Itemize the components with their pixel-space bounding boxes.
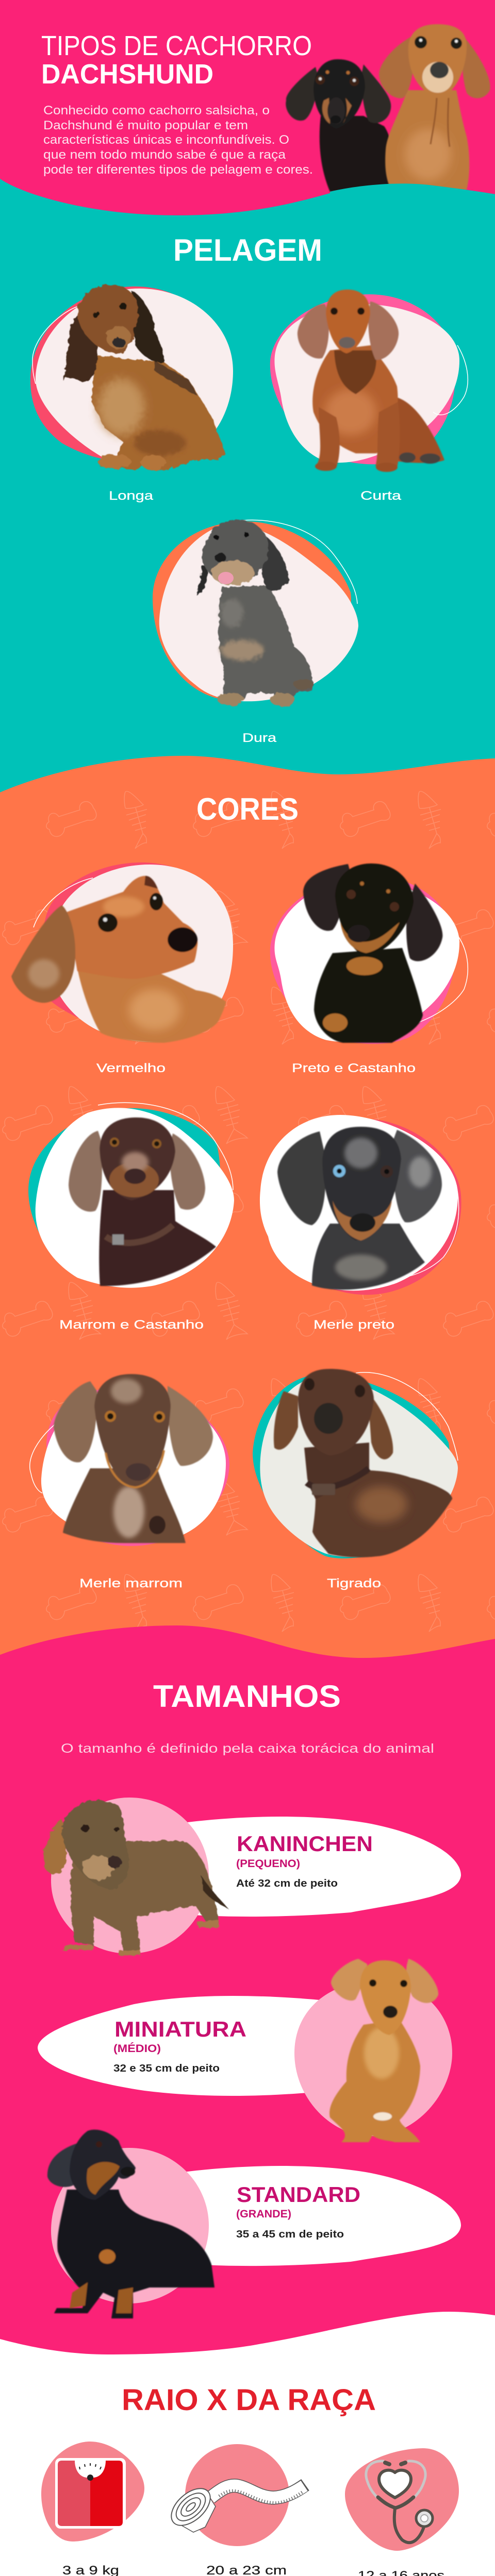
panel: pelagem curta <box>270 290 468 472</box>
name: kaninchen: KANINCHEN <box>237 1832 373 1856</box>
outline arc <box>32 307 77 384</box>
blob backing <box>42 862 222 1036</box>
white speech blob <box>175 2166 461 2266</box>
blob backing red <box>30 286 227 462</box>
dog: brown merle <box>54 1374 213 1543</box>
outline arc <box>227 520 357 604</box>
heading: raio x da raca: RAIO X DA RAÇA <box>122 2383 376 2417</box>
dog: black and tan header dog <box>286 59 393 192</box>
pink circle <box>51 2148 209 2303</box>
icon: measuring tape <box>164 2444 305 2546</box>
panel background: teal pelagem section <box>0 170 495 819</box>
subtitle: tamanhos: O tamanho é definido pela caixa torácica do animal <box>61 1741 434 1756</box>
panel: tamanhos background with wave <box>0 1625 495 2370</box>
pink circle <box>51 1798 209 1954</box>
panel: miniatura <box>38 1959 452 2142</box>
blob backing red <box>289 1119 461 1295</box>
tongue <box>218 572 234 584</box>
dog: black merle <box>277 1127 442 1290</box>
measure: miniatura: 32 e 35 cm de peito <box>113 2063 220 2074</box>
intro text block: pode ter diferentes tipos de pelagem e cores. <box>43 163 313 177</box>
outline arc <box>356 1372 458 1461</box>
dog: brown header dog <box>379 24 490 190</box>
label: vermelho: Vermelho <box>96 1061 166 1075</box>
panel: raio x background white <box>0 2312 495 2576</box>
panel: pelagem dura <box>153 520 358 706</box>
name: miniatura: MINIATURA <box>114 2017 246 2041</box>
dog: wire coat <box>196 520 312 706</box>
label: preto e castanho: Preto e Castanho <box>292 1061 416 1075</box>
label: marrom e castanho: Marrom e Castanho <box>59 1318 204 1332</box>
panel: cor vermelho <box>11 862 233 1043</box>
blob backing teal <box>28 1108 220 1286</box>
intro text block: que nem todo mundo sabe é que a raça <box>43 148 286 162</box>
panel: cor marrom e castanho <box>28 1103 234 1288</box>
title: TIPOS DE CACHORRO <box>41 30 312 61</box>
outline arc <box>98 1103 233 1190</box>
blob white <box>36 1108 234 1288</box>
dog: miniatura <box>329 1959 438 2142</box>
white speech blob <box>38 1996 320 2096</box>
blob light grey <box>260 1377 458 1557</box>
heading: tamanhos: TAMANHOS <box>153 1679 341 1714</box>
label: tigrado: Tigrado <box>327 1577 381 1590</box>
panel: cor merle marrom <box>30 1374 229 1546</box>
blob white <box>260 1115 458 1291</box>
blob backing pink <box>46 1387 229 1546</box>
blob backing <box>270 876 455 1044</box>
dog: kaninchen <box>44 1800 229 1955</box>
white speech blob <box>175 1817 461 1917</box>
label: longa: Longa <box>109 489 154 503</box>
panel: cores background with wave <box>0 756 495 1700</box>
blob cream <box>159 523 358 701</box>
icon: scale <box>41 2442 144 2541</box>
dog: red <box>11 876 226 1043</box>
panel: header <box>0 0 495 215</box>
blob white <box>41 1389 226 1541</box>
outline arc <box>433 345 468 415</box>
size: grande: (GRANDE) <box>236 2208 291 2220</box>
size: pequeno: (PEQUENO) <box>236 1858 300 1870</box>
panel: kaninchen <box>44 1798 461 1955</box>
blob backing orange <box>153 521 351 701</box>
header pink wave background <box>0 0 495 215</box>
panel: pelagem longa <box>30 285 233 471</box>
heading: cores: CORES <box>196 792 299 826</box>
blob backing pink <box>270 294 455 464</box>
outline arc <box>30 1422 58 1493</box>
dog: brown and tan <box>69 1117 216 1286</box>
dog: long coat <box>63 285 226 471</box>
intro text block: Conhecido como cachorro salsicha, o <box>43 104 270 117</box>
pink circle <box>294 1981 452 2136</box>
name: standard: STANDARD <box>237 2182 360 2207</box>
blob cream <box>36 289 233 465</box>
panel: standard <box>47 2130 461 2318</box>
panel: cor preto e castanho <box>270 863 468 1044</box>
intro text block: características únicas e inconfundíveis. O <box>43 133 289 147</box>
blob cream <box>274 304 459 463</box>
dog: standard <box>47 2130 214 2318</box>
label: curta: Curta <box>360 489 402 503</box>
measure: standard: 35 a 45 cm de peito <box>236 2229 344 2240</box>
pattern of bones and fish <box>0 756 495 1700</box>
title: DACHSHUND <box>41 59 213 90</box>
dog: brindle <box>274 1369 452 1557</box>
panel: cor tigrado <box>253 1369 458 1558</box>
title <box>41 30 312 90</box>
measure: kaninchen: Até 32 cm de peito <box>236 1878 338 1889</box>
intro text block <box>43 104 313 177</box>
blob white <box>274 880 459 1042</box>
teal overlap of dogs bottom <box>330 183 495 206</box>
size: medio: (MÉDIO) <box>113 2043 161 2055</box>
blob cream <box>51 865 233 1042</box>
label: merle preto: Merle preto <box>314 1318 394 1332</box>
heading: pelagem: PELAGEM <box>173 233 322 267</box>
outline arc <box>402 1185 459 1278</box>
blob backing teal <box>253 1375 450 1558</box>
outline arc <box>418 935 468 1023</box>
dog: black and tan <box>303 863 442 1043</box>
dog: short coat <box>298 290 444 472</box>
label: dura: Dura <box>242 731 277 745</box>
outline arc <box>34 878 93 927</box>
intro text block: Dachshund é muito popular e tem <box>43 118 248 132</box>
panel: cor merle preto <box>260 1115 461 1295</box>
icon: stethoscope <box>345 2448 459 2551</box>
label: merle marrom: Merle marrom <box>79 1577 183 1590</box>
